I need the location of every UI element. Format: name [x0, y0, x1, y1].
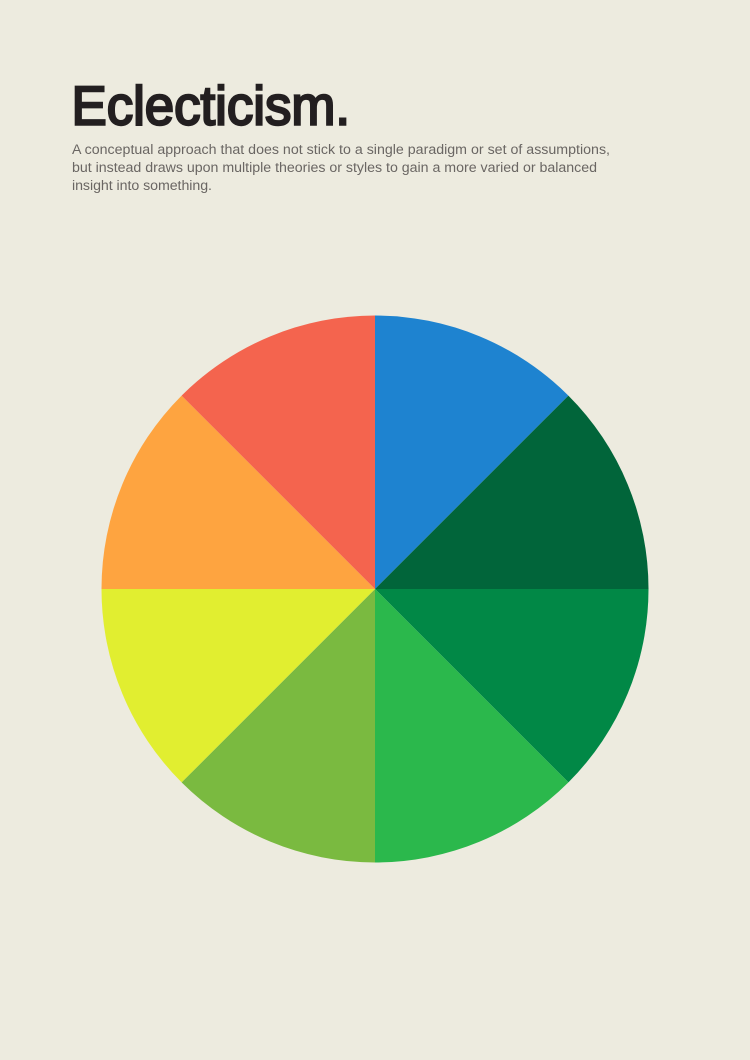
slice: blue: [375, 316, 568, 589]
description text: A conceptual approach that does not stick to a single paradigm or set of assumptions,: [72, 142, 610, 158]
title: Eclecticism.: [72, 74, 350, 136]
slice: orange: [102, 396, 375, 589]
slice: green: [375, 589, 648, 782]
slice: coral red: [182, 316, 375, 589]
description text: insight into something.: [72, 178, 212, 194]
slice: yellow: [102, 589, 375, 782]
description text: but instead draws upon multiple theories or styles to gain a more varied or balanced: [72, 160, 597, 176]
pie chart: [102, 316, 648, 863]
slice: bright green: [375, 589, 568, 863]
slice: olive green: [182, 589, 375, 863]
description text: [72, 142, 610, 194]
slice: dark green: [375, 396, 648, 589]
